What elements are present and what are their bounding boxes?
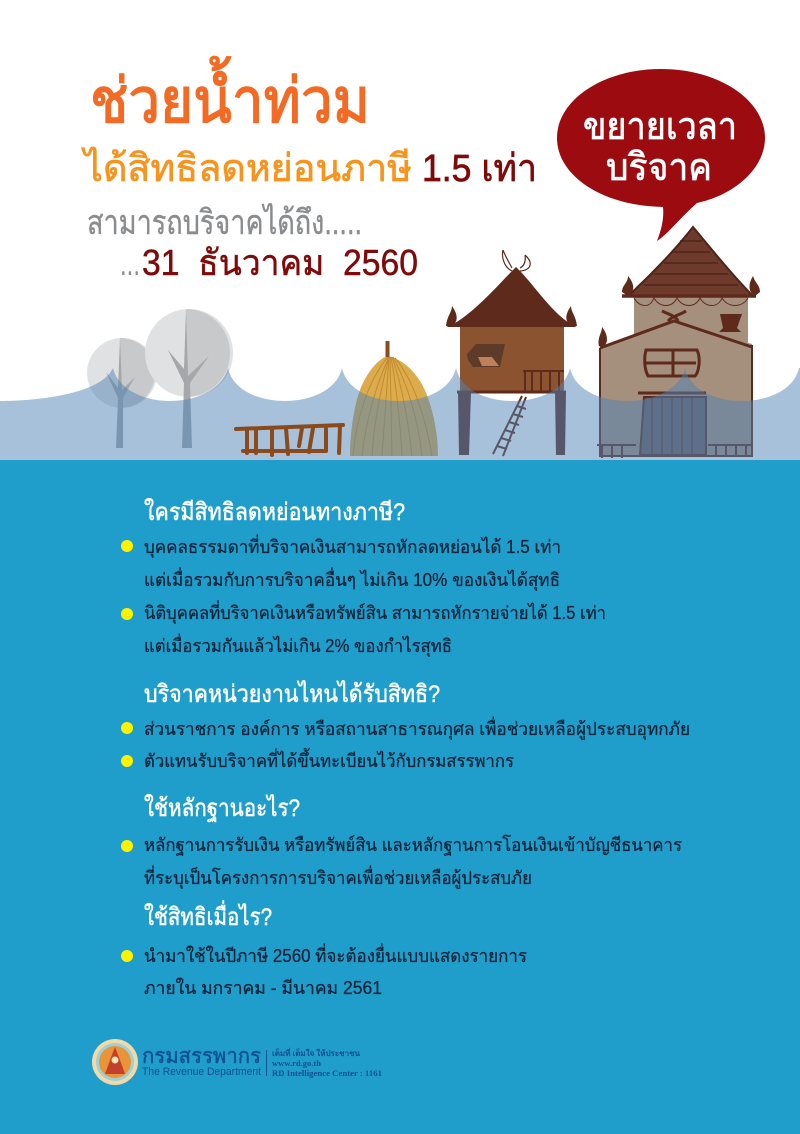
contact text: [272, 1047, 382, 1078]
text: project name: ที่ระบุเป็นโครงการการบริจาคเพื่อช่วยเหลือผู้ประสบภัย: [144, 865, 532, 889]
text: registered agents: ตัวแทนรับบริจาคที่ได้ขึ้นทะเบียนไว้กับกรมสรรพากร: [144, 748, 514, 771]
text: government agencies: ส่วนราชการ องค์การ หรือสถานสาธารณกุศล เพื่อช่วยเหลือผู้ประสบอุทกภัย: [144, 716, 690, 740]
department name: The Revenue Department: [142, 1066, 261, 1078]
fence: [236, 425, 343, 455]
section: when: [121, 900, 527, 998]
text: receipts: หลักฐานการรับเงิน หรือทรัพย์สิน และหลักฐานการโอนเงินเข้าบัญชีธนาคาร: [144, 834, 682, 856]
heading: evidence: ใช้หลักฐานอะไร?: [144, 794, 300, 822]
stilt house: [446, 250, 577, 456]
heading: when: ใช้สิทธิเมื่อไร?: [144, 900, 272, 931]
text: individuals: บุคคลธรรมดาที่บริจาคเงินสามารถหักลดหย่อนได้ 1.5 เท่า: [144, 534, 561, 558]
bullet: [121, 540, 133, 552]
bullet: [121, 840, 133, 852]
large house: [597, 227, 760, 458]
bullet: [121, 608, 133, 620]
lower blue panel: [0, 460, 800, 1134]
heading: who is eligible: ใครมีสิทธิลดหย่อนทางภาษี?: [144, 498, 405, 526]
deadline text: ...: [120, 245, 140, 283]
tree large: [145, 309, 233, 448]
text: companies: นิติบุคคลที่บริจาคเงินหรือทรัพย์สิน สามารถหักรายจ่ายได้ 1.5 เท่า: [144, 600, 606, 624]
deadline text: สามารถบริจาคได้ถึง.....: [87, 203, 362, 242]
contact text: เต็มที่ เต็มใจ ให้ประชาชน: [272, 1047, 361, 1058]
speech bubble: [557, 69, 765, 241]
haystack: [350, 341, 438, 456]
contact text: www.rd.go.th: [272, 1059, 322, 1068]
section: evidence: [121, 794, 682, 889]
text: tax year: นำมาใช้ในปีภาษี 2560 ที่จะต้องยื่นแบบแสดงรายการ: [144, 943, 527, 966]
bullet: [121, 722, 133, 734]
deadline text: [87, 203, 418, 283]
department name: กรมสรรพากร: [142, 1045, 261, 1068]
icon: revenue department seal: [92, 1039, 138, 1085]
bullet: [121, 950, 133, 962]
text: filing period: ภายใน มกราคม - มีนาคม 2561: [144, 977, 382, 998]
subtitle: 1.5 เท่า: [422, 148, 537, 190]
section: who is eligible: [121, 498, 606, 657]
footer logo block: [92, 1039, 382, 1085]
deadline text: 31 ธันวาคม 2560: [142, 242, 418, 283]
subtitle: ได้สิทธิลดหย่อนภาษี: [81, 147, 412, 190]
text: companies limit: แต่เมื่อรวมกันแล้วไม่เกิน 2% ของกำไรสุทธิ: [144, 633, 452, 657]
section: which agencies: [121, 680, 690, 771]
flood water: [0, 368, 800, 460]
tree small: [87, 338, 157, 448]
heading: which agencies: บริจาคหน่วยงานไหนได้รับสิทธิ?: [144, 680, 440, 708]
speech bubble: บริจาค: [606, 147, 712, 189]
contact text: RD Intelligence Center : 1161: [272, 1069, 382, 1078]
bullet: [121, 755, 133, 767]
department name: [142, 1045, 261, 1078]
text: individuals limit: แต่เมื่อรวมกับการบริจาคอื่นๆ ไม่เกิน 10% ของเงินได้สุทธิ: [144, 567, 560, 591]
speech bubble: ขยายเวลา: [583, 106, 737, 148]
title: ช่วยน้ำท่วม: [90, 56, 370, 136]
